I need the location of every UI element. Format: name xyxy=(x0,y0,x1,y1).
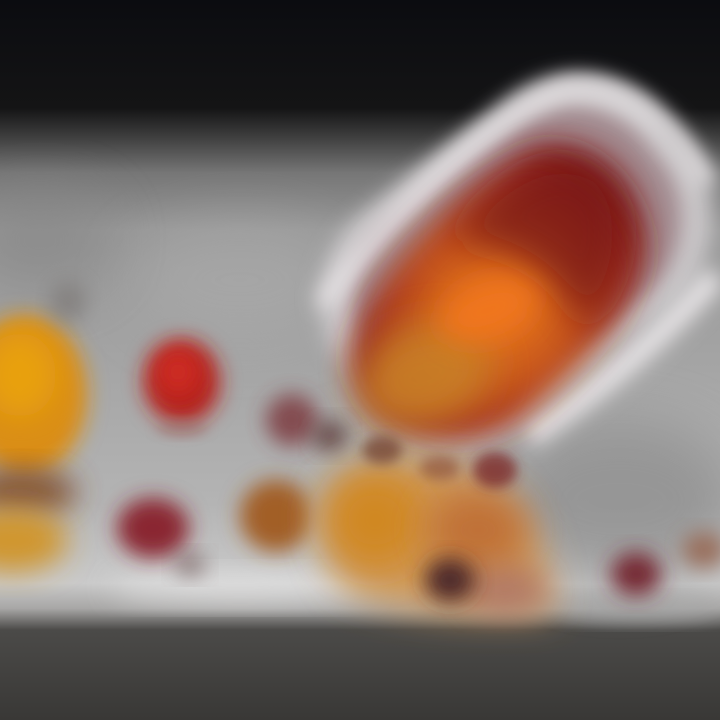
dish: outer white rim xyxy=(275,30,720,488)
dark berry in powder xyxy=(425,558,475,602)
amber spice piece xyxy=(240,480,312,552)
small dark speck upper left xyxy=(50,282,86,322)
crimson berry lower left xyxy=(117,498,206,577)
dish: dark red shade upper xyxy=(450,160,625,330)
dish: amber lower left xyxy=(341,302,509,448)
brown piece at right edge xyxy=(682,532,720,568)
surface shading xyxy=(0,190,720,622)
red berry xyxy=(144,340,220,436)
dark berries along the dish edge xyxy=(362,436,517,488)
dish: orange glow xyxy=(431,267,545,353)
dish: inner wall xyxy=(315,68,719,449)
dish: bright lower rim highlight xyxy=(528,275,716,436)
dish: red liquid xyxy=(350,145,645,441)
orange fruit at left xyxy=(0,315,87,572)
amber spilled powder xyxy=(320,460,552,615)
dish: bright upper rim highlight xyxy=(322,87,708,305)
dark red berry pair near dish xyxy=(266,394,348,452)
dish xyxy=(275,30,720,488)
dark berry right xyxy=(611,552,661,596)
